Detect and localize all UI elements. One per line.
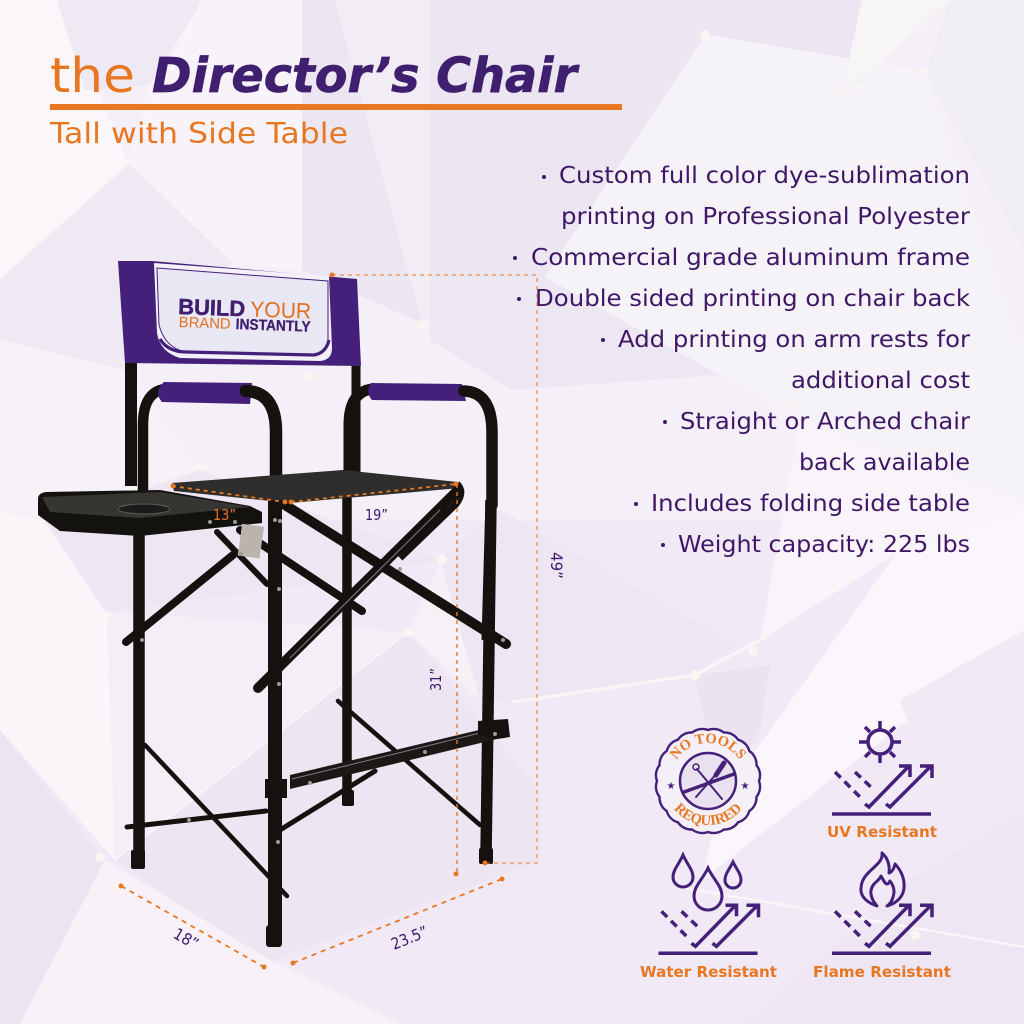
- chair rear frame: [131, 360, 372, 796]
- badge: no tools required: ★: [741, 781, 750, 792]
- dimension label 18 in: 18”: [170, 924, 202, 953]
- dimension label 23.5 in: 23.5”: [388, 922, 431, 954]
- arm tubes over pads: [246, 391, 492, 505]
- icon: water resistant: [658, 855, 758, 953]
- front X braces: [258, 492, 506, 688]
- title: product name: Director’s Chair: [152, 48, 580, 104]
- chair back canvas: [118, 261, 361, 366]
- chair feet: [131, 790, 493, 947]
- subtitle: Tall with Side Table: [49, 117, 348, 150]
- badge: no tools required: ★: [667, 781, 676, 792]
- badge: no tools required: REQUIRED: [674, 802, 740, 826]
- dimension label 13 in: 13”: [213, 506, 236, 524]
- label: water resistant: Water Resistant: [640, 963, 777, 981]
- feature list: Double sided printing on chair back: [535, 286, 971, 312]
- chair back slogan: YOUR: [250, 297, 312, 324]
- dimension label 19 in: 19”: [365, 506, 388, 524]
- dimension label 31 in: 31”: [427, 668, 445, 691]
- frame bolts: [140, 518, 505, 844]
- arm pads: [158, 382, 466, 404]
- label: flame resistant: Flame Resistant: [813, 963, 951, 981]
- badge: no tools required: [654, 728, 762, 834]
- chair back print panel: [154, 263, 332, 361]
- icon: flame resistant: [832, 853, 932, 953]
- dimension end dots: [118, 272, 504, 970]
- badge: no tools required: NO TOOLS: [669, 734, 746, 760]
- dimension lines: [121, 275, 537, 967]
- icon: UV resistant: [832, 721, 932, 814]
- feature list: back available: [799, 450, 970, 476]
- title underline: [50, 104, 622, 110]
- chair back slogan: INSTANTLY: [235, 316, 311, 336]
- chair legs and left arm post: [139, 389, 491, 935]
- redraw front legs: [268, 500, 282, 935]
- label: UV resistant: UV Resistant: [827, 823, 937, 841]
- chair back slogan: BUILD: [178, 294, 246, 321]
- feature list: Add printing on arm rests for: [618, 327, 971, 353]
- feature list: Straight or Arched chair: [680, 409, 971, 435]
- seat: [172, 470, 460, 503]
- feature list: Custom full color dye-sublimation: [559, 163, 970, 189]
- feature list: printing on Professional Polyester: [561, 204, 971, 230]
- chair cross braces: [126, 530, 480, 896]
- feature list: additional cost: [791, 368, 970, 394]
- footrest: [265, 719, 510, 798]
- feature list: Commercial grade aluminum frame: [531, 245, 970, 271]
- feature list: Weight capacity: 225 lbs: [678, 532, 970, 558]
- dimension label 49 in: 49”: [547, 552, 566, 579]
- side table: [38, 490, 264, 559]
- chair back slogan: BRAND: [178, 314, 231, 333]
- title: the: [50, 48, 135, 104]
- chair back slogan: [177, 294, 312, 336]
- feature list: [513, 163, 971, 558]
- chair: [38, 261, 510, 947]
- feature list: Includes folding side table: [651, 491, 970, 517]
